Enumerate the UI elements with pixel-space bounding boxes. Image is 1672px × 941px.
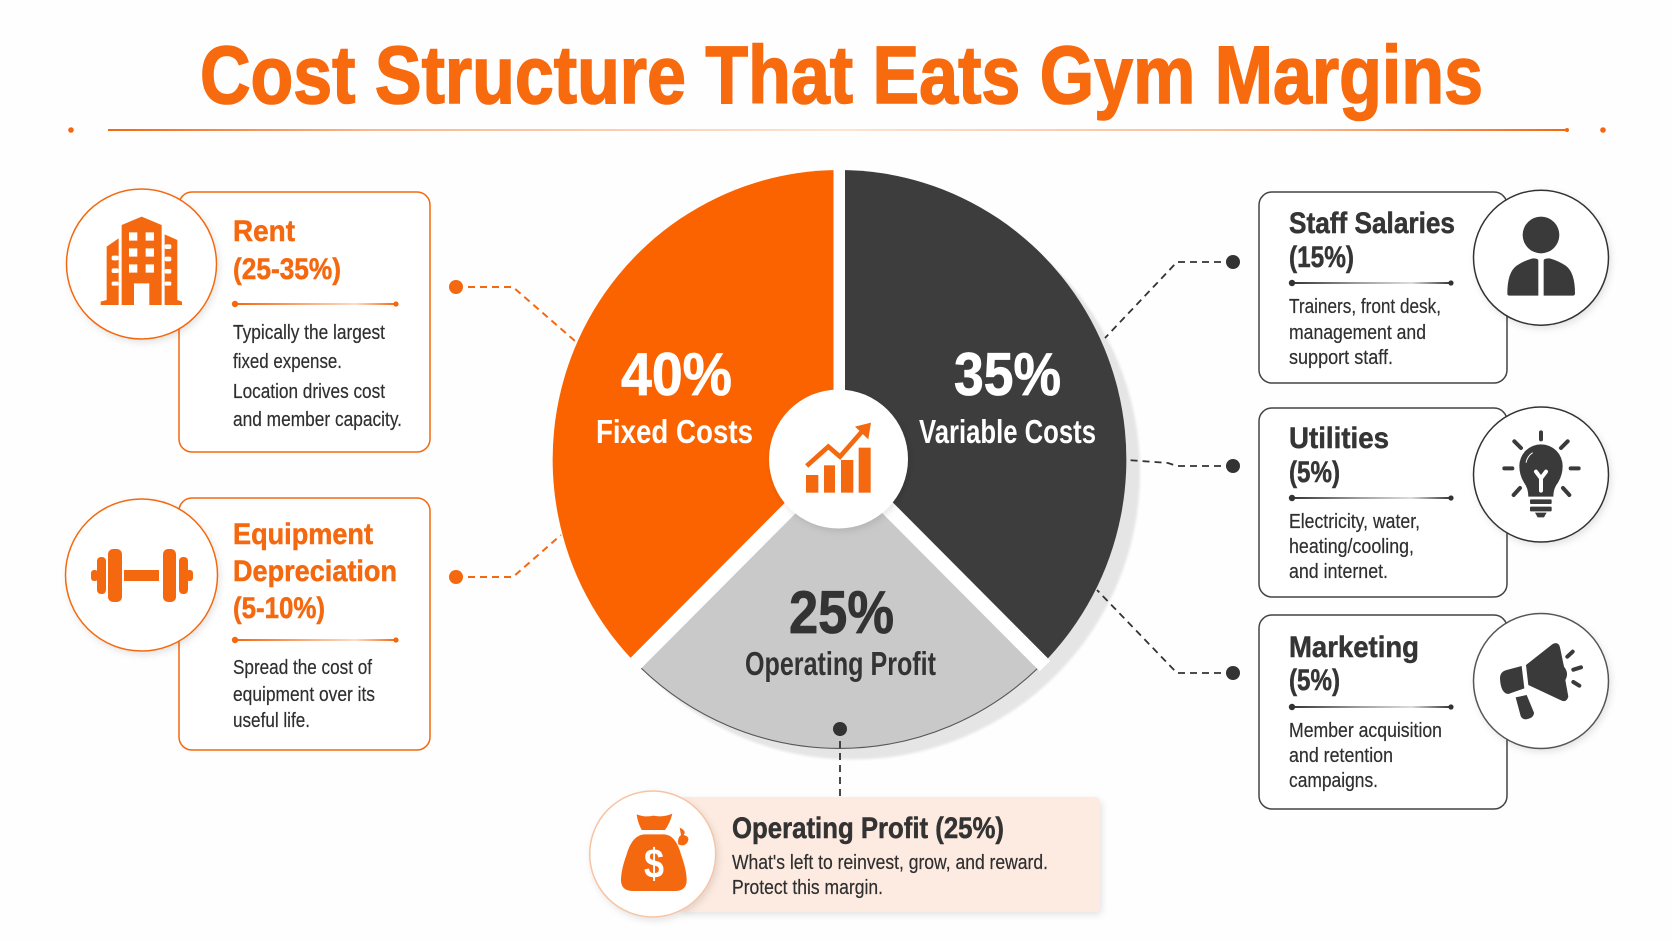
label: 40% fixed costs: Fixed Costs <box>596 413 753 450</box>
text: utilities description: Electricity, water, <box>1289 511 1420 533</box>
pie chart <box>553 168 1140 760</box>
heading: marketing: Marketing <box>1289 631 1419 664</box>
text: equipment description: equipment over its <box>233 684 375 706</box>
label: 25% operating profit: 25% <box>789 579 894 646</box>
text: equipment description: useful life. <box>233 710 310 732</box>
heading: equipment depreciation: Equipment <box>233 518 373 551</box>
text: operating profit description <box>732 852 1048 899</box>
connector: staff salaries <box>1105 255 1240 338</box>
text: utilities description: and internet. <box>1289 561 1388 583</box>
text: equipment description: Spread the cost of <box>233 657 372 679</box>
text: rent description: and member capacity. <box>233 409 402 431</box>
label: 35% variable costs: 35% <box>954 341 1061 408</box>
text: rent description: Typically the largest <box>233 322 385 344</box>
panel: operating profit callout <box>590 791 1100 917</box>
panel: staff salaries <box>1259 190 1608 383</box>
text: rent description: Location drives cost <box>233 381 385 403</box>
label: 40% fixed costs <box>596 341 753 450</box>
connector: marketing <box>1097 590 1240 680</box>
title: Cost Structure That Eats Gym Margins <box>200 30 1483 121</box>
text: marketing description: Member acquisition <box>1289 720 1442 742</box>
text: marketing description: and retention <box>1289 745 1393 767</box>
slice: variable costs <box>840 170 1126 664</box>
heading: marketing <box>1289 631 1419 697</box>
text: operating profit description: Protect this margin. <box>732 877 883 899</box>
icon: light bulb <box>1474 407 1608 542</box>
title divider rule <box>68 127 1606 133</box>
panel: marketing <box>1259 614 1608 809</box>
heading: operating profit: Operating Profit (25%) <box>732 812 1004 845</box>
label: 25% operating profit <box>745 579 936 682</box>
text: staff description: management and <box>1289 322 1426 344</box>
text: equipment description <box>233 657 375 732</box>
panel: rent <box>66 189 430 452</box>
icon: dumbbell <box>66 499 218 651</box>
heading: staff salaries: (15%) <box>1289 241 1354 274</box>
connector: operating profit <box>833 722 847 799</box>
heading: equipment depreciation <box>233 518 397 625</box>
label: 35% variable costs <box>919 341 1096 450</box>
slice: operating profit <box>636 460 1042 749</box>
heading: utilities: Utilities <box>1289 422 1389 455</box>
text: staff description: Trainers, front desk, <box>1289 296 1441 318</box>
heading: staff salaries <box>1289 207 1455 274</box>
heading: equipment depreciation: Depreciation <box>233 555 397 588</box>
icon: person <box>1474 190 1608 325</box>
heading: rent: Rent <box>233 215 295 248</box>
heading: marketing: (5%) <box>1289 664 1340 697</box>
connector: equipment depreciation <box>449 535 561 584</box>
connector: utilities <box>1127 459 1240 473</box>
text: marketing description: campaigns. <box>1289 770 1378 792</box>
heading: equipment depreciation: (5-10%) <box>233 592 325 625</box>
heading: staff salaries: Staff Salaries <box>1289 207 1455 240</box>
icon: money bag: $ <box>644 840 664 887</box>
text: staff description: support staff. <box>1289 347 1393 369</box>
center circle with growth chart icon <box>769 390 908 528</box>
label: 25% operating profit: Operating Profit <box>745 645 936 682</box>
icon: megaphone <box>1474 614 1608 748</box>
label: 35% variable costs: Variable Costs <box>919 413 1096 450</box>
text: rent description: fixed expense. <box>233 351 342 373</box>
text: utilities description <box>1289 511 1420 583</box>
heading: utilities: (5%) <box>1289 456 1340 489</box>
label: 40% fixed costs: 40% <box>621 341 732 408</box>
icon: money bag <box>590 791 716 917</box>
heading: utilities <box>1289 422 1389 489</box>
text: staff description <box>1289 296 1441 369</box>
heading: rent <box>233 215 341 286</box>
text: marketing description <box>1289 720 1442 792</box>
connector: rent <box>449 280 575 341</box>
heading: rent: (25-35%) <box>233 253 341 286</box>
panel: equipment depreciation <box>66 498 430 750</box>
slice: fixed costs <box>553 170 840 664</box>
text: operating profit description: What's left to reinvest, grow, and reward. <box>732 852 1048 874</box>
icon: building <box>66 189 216 339</box>
text: rent description <box>233 322 402 431</box>
panel: utilities <box>1259 407 1608 597</box>
text: utilities description: heating/cooling, <box>1289 536 1414 558</box>
